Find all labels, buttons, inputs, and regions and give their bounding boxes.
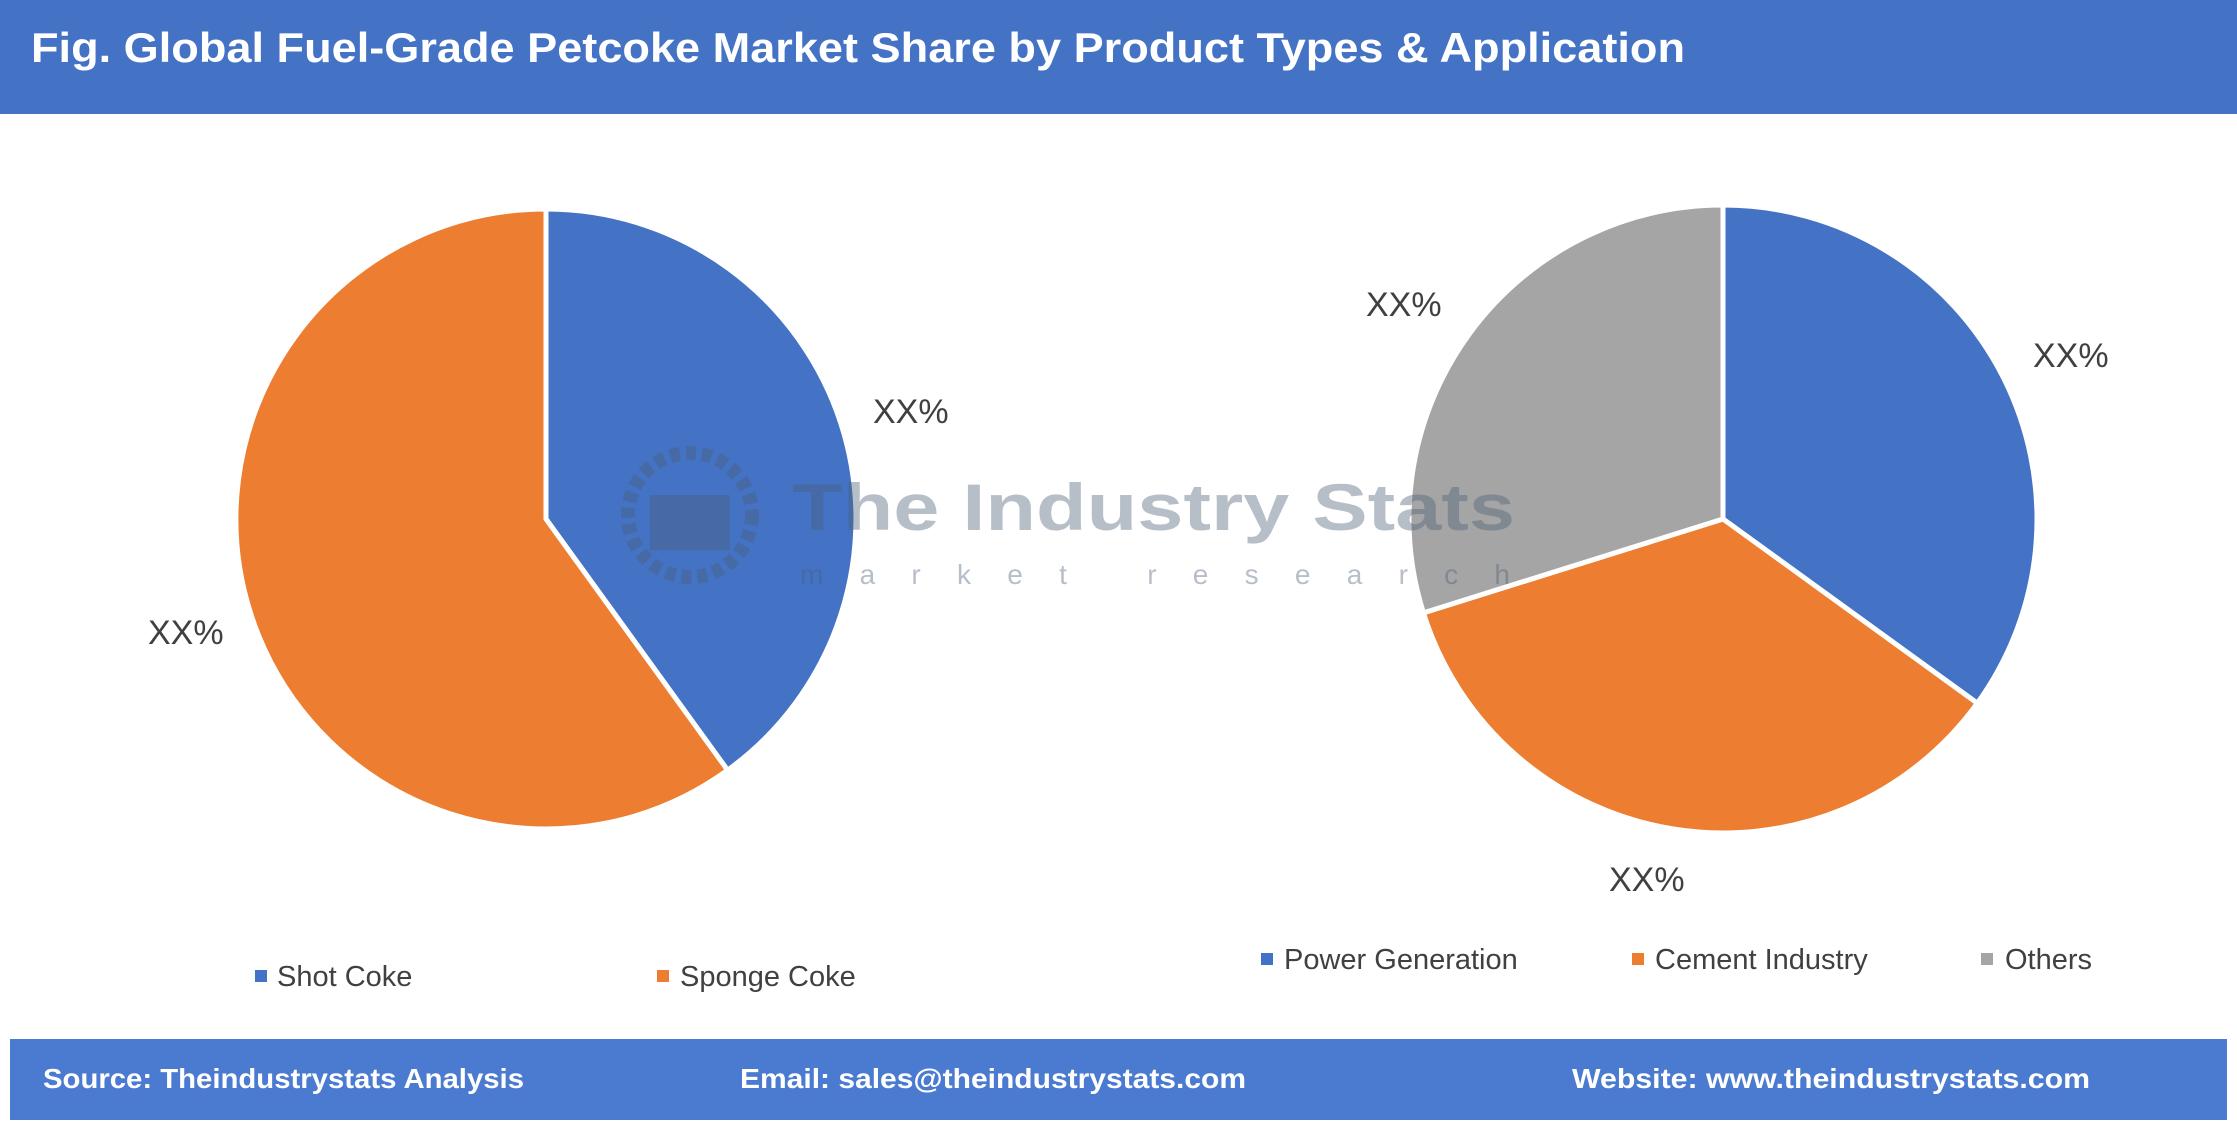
title: Fig. Global Fuel-Grade Petcoke Market Share by Product Types & Application	[31, 24, 1685, 71]
footer bar: Website: www.theindustrystats.com	[1572, 1063, 2090, 1094]
footer bar: Source: Theindustrystats Analysis	[43, 1063, 524, 1094]
legend left: Sponge Coke	[680, 961, 856, 993]
pie labels: XX%	[2033, 337, 2109, 375]
watermark	[628, 453, 1515, 590]
right pie chart	[1409, 205, 2037, 833]
legend left	[255, 961, 856, 993]
footer bar	[10, 1039, 2227, 1120]
pie labels: XX%	[148, 614, 224, 652]
legend right	[1261, 944, 2092, 976]
legend right: Power Generation	[1284, 944, 1518, 976]
legend left: Shot Coke	[277, 961, 412, 993]
pie labels	[148, 286, 2109, 899]
pie labels: XX%	[1366, 286, 1442, 324]
legend right: Cement Industry	[1655, 944, 1868, 976]
header bar	[0, 0, 2237, 114]
left pie chart	[236, 209, 856, 829]
watermark: The Industry Stats	[792, 470, 1515, 544]
watermark: market research	[800, 559, 1510, 590]
pie labels: XX%	[873, 393, 949, 431]
legend right: Others	[2005, 944, 2092, 976]
footer bar: Email: sales@theindustrystats.com	[740, 1063, 1246, 1094]
pie labels: XX%	[1609, 861, 1685, 899]
